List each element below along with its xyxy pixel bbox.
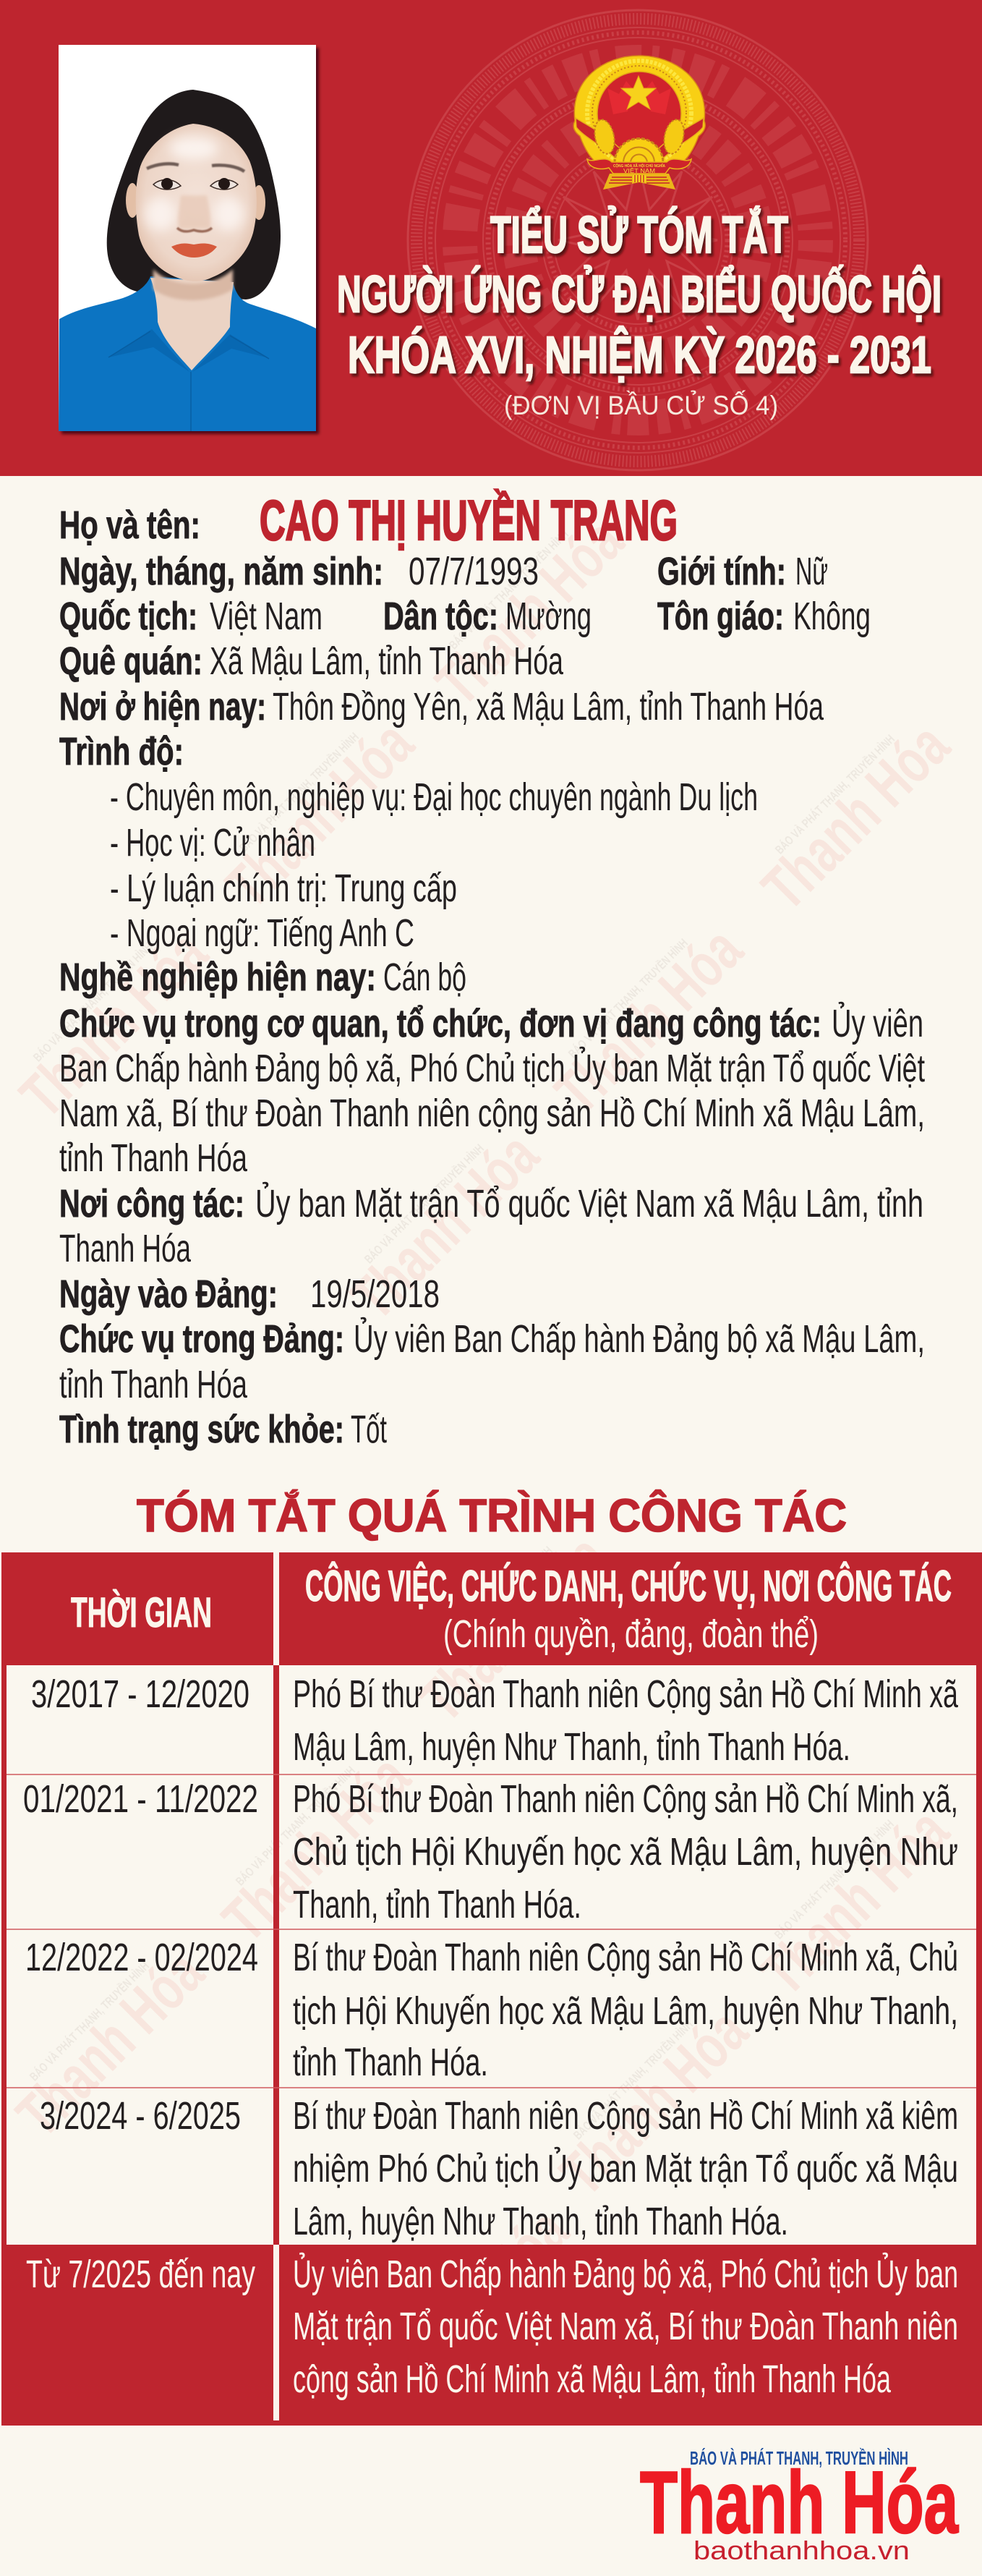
education: - Học vị: Cử nhân: [110, 821, 315, 864]
party admission date: Ngày vào Đảng:: [59, 1272, 278, 1316]
row 5: current position highlight: [1, 2245, 982, 2426]
workplace: [59, 1182, 923, 1270]
watermarks: BÁO VÀ PHÁT THANH, TRUYỀN HÌNH: [233, 1764, 358, 1889]
nationality, ethnicity, religion: Việt Nam: [210, 595, 323, 638]
watermarks: Thanh Hóa: [338, 1119, 552, 1332]
row 3: [25, 1936, 958, 2084]
title: [337, 206, 942, 384]
section heading: work history: TÓM TẮT QUÁ TRÌNH CÔNG TÁC: [137, 1489, 847, 1542]
watermarks: BÁO VÀ PHÁT THANH, TRUYỀN HÌNH: [571, 2018, 696, 2143]
table header: (Chính quyền, đảng, đoàn thể): [443, 1612, 819, 1656]
date of birth and gender: Nữ: [795, 550, 828, 593]
watermarks: BÁO VÀ PHÁT THANH, TRUYỀN HÌNH: [236, 730, 362, 855]
full name: CAO THỊ HUYỀN TRANG: [260, 488, 678, 552]
nationality, ethnicity, religion: Mường: [505, 595, 592, 638]
panel: personal information: [59, 488, 925, 1451]
date of birth and gender: Giới tính:: [657, 550, 786, 593]
party position: Chức vụ trong Đảng:: [59, 1317, 344, 1361]
watermarks: BÁO VÀ PHÁT THANH, TRUYỀN HÌNH: [430, 1544, 555, 1669]
nationality, ethnicity, religion: Tôn giáo:: [657, 595, 784, 638]
party admission date: 19/5/2018: [310, 1272, 440, 1316]
table frame: [1, 1552, 982, 2245]
hometown: [59, 639, 564, 683]
hometown: Quê quán:: [59, 639, 202, 683]
row 3: 12/2022 - 02/2024: [25, 1936, 258, 1979]
education: - Ngoại ngữ: Tiếng Anh C: [110, 911, 414, 955]
watermarks: Thanh Hóa: [423, 505, 636, 718]
portrait photo: [59, 45, 316, 431]
full name: [59, 488, 678, 552]
table header: THỜI GIAN: [71, 1589, 212, 1636]
date of birth and gender: Ngày, tháng, năm sinh:: [59, 550, 383, 593]
watermarks: BÁO VÀ PHÁT THANH, TRUYỀN HÌNH: [772, 732, 897, 857]
watermarks: BÁO VÀ PHÁT THANH, TRUYỀN HÌNH: [30, 940, 155, 1065]
workplace: Nơi công tác:: [59, 1182, 244, 1225]
workplace: Thanh Hóa: [59, 1227, 192, 1270]
full name: Họ và tên:: [59, 503, 200, 547]
bronze drum pattern: [408, 10, 868, 470]
education: Trình độ:: [59, 730, 184, 773]
watermarks: Thanh Hóa: [407, 1521, 620, 1735]
watermarks: BÁO VÀ PHÁT THANH, TRUYỀN HÌNH: [27, 1959, 152, 2084]
date of birth and gender: [59, 550, 828, 593]
icon: national emblem: VIỆT NAM: [623, 168, 655, 174]
current position: Ủy viên: [832, 1002, 923, 1045]
current residence: [59, 685, 824, 728]
row 1: [31, 1672, 959, 1769]
row 1: 3/2017 - 12/2020: [31, 1672, 249, 1716]
header banner: [0, 0, 982, 476]
row 2: 01/2021 - 11/2022: [23, 1777, 258, 1821]
party position: tỉnh Thanh Hóa: [59, 1363, 248, 1406]
hometown: Xã Mậu Lâm, tỉnh Thanh Hóa: [210, 639, 564, 683]
watermarks: Thanh Hóa: [547, 1995, 761, 2209]
current residence: Nơi ở hiện nay:: [59, 685, 266, 728]
row 4: [40, 2094, 958, 2243]
row 2: [23, 1777, 958, 1926]
row 5: current position highlight: Từ 7/2025 đến nay: [26, 2253, 255, 2296]
table header: [1, 1552, 982, 1665]
nationality, ethnicity, religion: Dân tộc:: [383, 595, 498, 638]
watermarks: Thanh Hóa: [4, 1937, 217, 2150]
occupation: Cán bộ: [383, 956, 466, 999]
table: work history: [1, 1552, 982, 2426]
current position: [59, 1002, 925, 1180]
logo: Thanh Hoa newspaper: baothanhhoa.vn: [693, 2535, 910, 2565]
icon: national emblem: [573, 56, 705, 190]
watermarks: BÁO VÀ PHÁT THANH, TRUYỀN HÌNH: [446, 527, 571, 652]
subtitle: (ĐƠN VỊ BẦU CỬ SỐ 4): [504, 390, 778, 420]
watermarks: Thanh Hóa: [368, 2195, 581, 2408]
party position: [59, 1317, 925, 1406]
watermarks: BÁO VÀ PHÁT THANH, TRUYỀN HÌNH: [362, 1142, 487, 1267]
nationality, ethnicity, religion: [59, 595, 871, 638]
watermarks: Thanh Hóa: [210, 1741, 423, 1955]
title: TIỂU SỬ TÓM TẮT: [490, 206, 788, 264]
watermarks: Thanh Hóa: [213, 707, 427, 921]
nationality, ethnicity, religion: Không: [793, 595, 871, 638]
nationality, ethnicity, religion: Quốc tịch:: [59, 595, 197, 638]
watermarks: Thanh Hóa: [7, 917, 221, 1131]
health status: Tốt: [351, 1408, 387, 1451]
watermarks: BÁO VÀ PHÁT THANH, TRUYỀN HÌNH: [565, 936, 691, 1061]
current position: tỉnh Thanh Hóa: [59, 1136, 248, 1180]
row 4: 3/2024 - 6/2025: [40, 2094, 241, 2138]
icon: national emblem: CỘNG HÒA XÃ HỘI CHỦ NGHĨA: [613, 163, 665, 169]
watermarks: Thanh Hóa: [542, 914, 756, 1127]
watermarks: BÁO VÀ PHÁT THANH, TRUYỀN HÌNH: [772, 1817, 897, 1942]
education: - Lý luận chính trị: Trung cấp: [110, 867, 457, 910]
row 2: Thanh, tỉnh Thanh Hóa.: [293, 1883, 581, 1926]
row 3: tỉnh Thanh Hóa.: [293, 2041, 488, 2084]
education: [59, 730, 758, 955]
occupation: Nghề nghiệp hiện nay:: [59, 956, 376, 999]
watermarks: [2, 503, 962, 2408]
date of birth and gender: 07/7/1993: [409, 550, 539, 593]
health status: Tình trạng sức khỏe:: [59, 1408, 344, 1451]
